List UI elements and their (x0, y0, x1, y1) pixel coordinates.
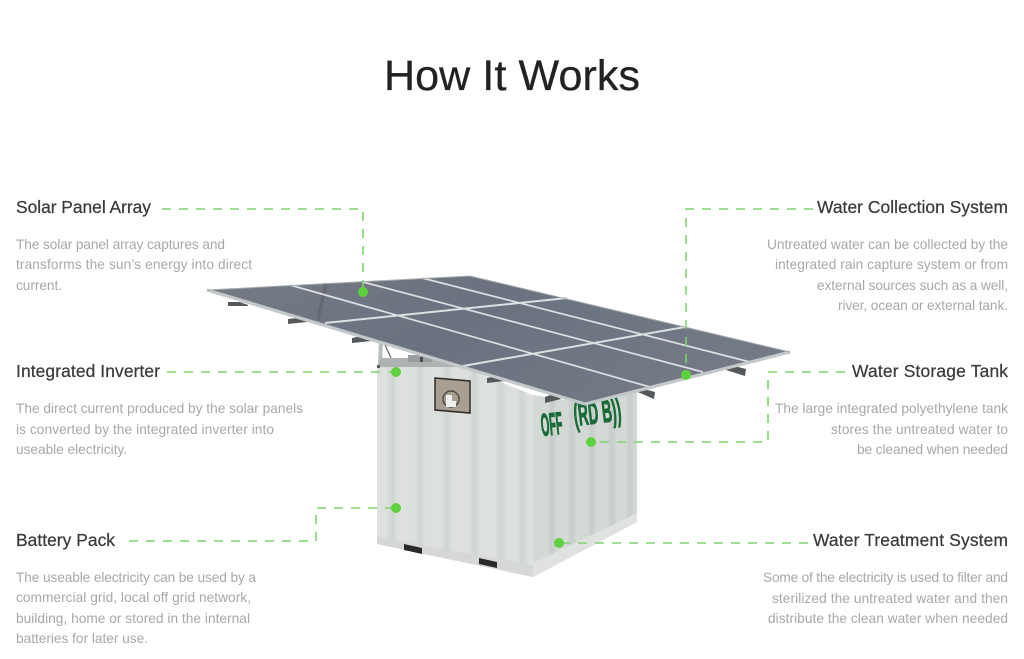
inverter hatch (435, 378, 470, 413)
text block: water storage tank (775, 361, 1008, 457)
container base rail (377, 537, 533, 577)
text block: integrated inverter: is converted by the integrated inverter into (16, 422, 274, 437)
text block: water storage tank: stores the untreated water to (831, 422, 1008, 437)
text block: water collection system: Water Collection System (817, 197, 1008, 217)
text block: battery pack: building, home or stored in the internal (16, 611, 250, 626)
text block: water collection system: integrated rain capture system or from (775, 257, 1008, 272)
text block: water collection system (767, 197, 1008, 313)
text block: battery pack: batteries for later use. (16, 631, 148, 646)
panel frame (207, 290, 790, 404)
panel cross dividers (325, 298, 685, 366)
forklift pockets (404, 544, 497, 568)
text block: solar panel array (16, 197, 252, 293)
text block: water collection system: Untreated water can be collected by the (767, 237, 1008, 252)
text block: integrated inverter: useable electricity. (16, 442, 127, 457)
solar panel array (207, 276, 790, 404)
container right face (533, 392, 637, 577)
container branding: (RD B)) (572, 393, 623, 434)
text block: integrated inverter: The direct current produced by the solar panels (16, 401, 303, 416)
text block: battery pack: Battery Pack (16, 530, 115, 550)
text block: battery pack (16, 530, 256, 646)
text block: battery pack: commercial grid, local off grid network, (16, 590, 251, 605)
text block: water storage tank: Water Storage Tank (852, 361, 1008, 381)
left face corrugation (392, 360, 522, 580)
connector: battery pack (129, 503, 401, 541)
connector: integrated inverter (167, 367, 401, 377)
connector: water collection system (681, 209, 813, 380)
text block: solar panel array: transforms the sun’s energy into direct (16, 257, 252, 272)
product illustration: solar container (207, 276, 790, 580)
panel reflection (318, 283, 326, 320)
text block: water collection system: external sources such as a well, (817, 278, 1008, 293)
title: How It Works (384, 52, 640, 100)
text block: integrated inverter (16, 361, 303, 457)
text block: water collection system: river, ocean or external tank. (838, 298, 1008, 313)
text block: water treatment system (763, 530, 1008, 626)
text block: solar panel array: current. (16, 278, 62, 293)
panel mounting brackets (228, 302, 746, 403)
text block: water storage tank: The large integrated polyethylene tank (775, 401, 1008, 416)
text block: water treatment system: sterilized the untreated water and then (772, 591, 1008, 606)
text block: water treatment system: distribute the clean water when needed (768, 611, 1008, 626)
text block: water treatment system: Some of the electricity is used to filter and (763, 570, 1008, 585)
text block: integrated inverter: Integrated Inverter (16, 361, 160, 381)
text block: solar panel array: Solar Panel Array (16, 197, 151, 217)
text block: battery pack: The useable electricity can be used by a (16, 570, 256, 585)
container branding (539, 393, 623, 443)
container branding: OFF (539, 406, 564, 443)
connector: solar panel array (162, 209, 368, 297)
connector: water storage tank (586, 372, 845, 447)
container left face (377, 366, 533, 577)
connector: water treatment system (554, 538, 808, 548)
text block: water treatment system: Water Treatment System (813, 530, 1008, 550)
text block: solar panel array: The solar panel array captures and (16, 237, 225, 252)
roof strut (377, 343, 462, 368)
text block: water storage tank: be cleaned when needed (857, 442, 1008, 457)
panel long dividers (290, 278, 750, 387)
right face corrugation (550, 394, 632, 554)
